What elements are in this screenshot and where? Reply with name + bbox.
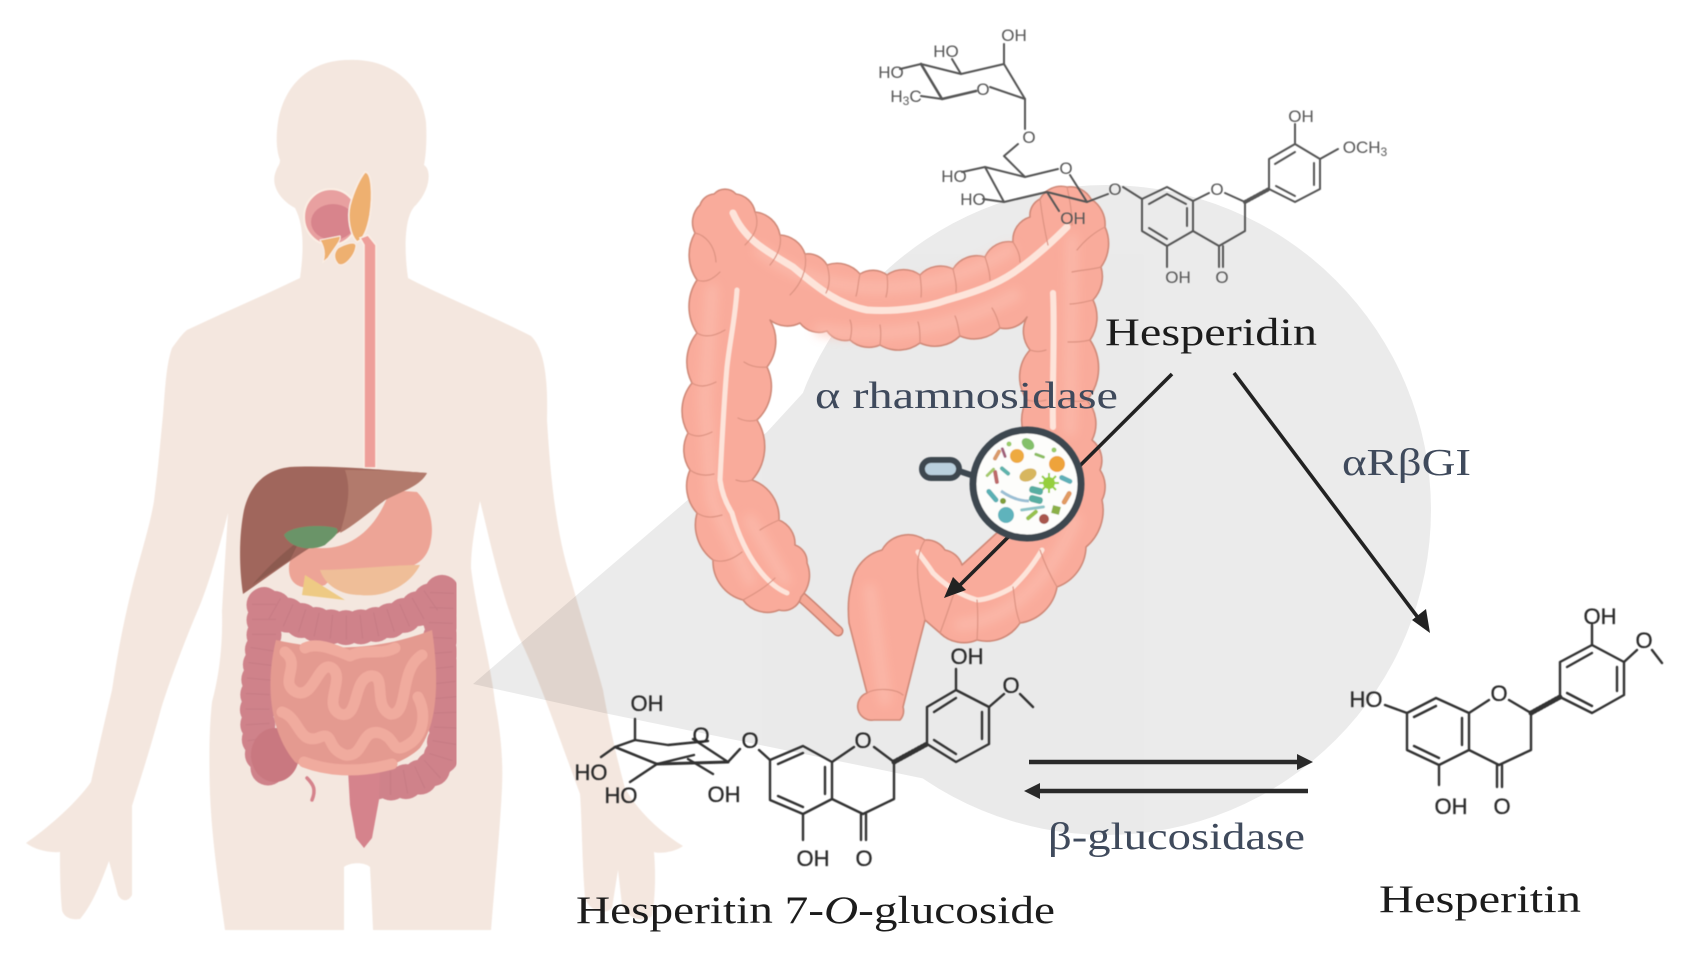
molecule: hesperitin: OH bbox=[1434, 794, 1468, 819]
molecule: hesperidin: HO bbox=[960, 190, 986, 209]
molecule: hesperitin 7-O-glucoside: O bbox=[1002, 673, 1020, 698]
molecule: hesperitin 7-O-glucoside: OH bbox=[950, 644, 984, 669]
molecule: hesperitin 7-O-glucoside: OH bbox=[796, 846, 830, 871]
icon: gallbladder bbox=[284, 526, 338, 548]
molecule: hesperidin: HO bbox=[933, 42, 959, 61]
molecule: hesperidin: O bbox=[1108, 180, 1122, 199]
arrow: reverse equilibrium bbox=[1024, 783, 1308, 799]
icon: appendix bbox=[800, 596, 838, 631]
human body silhouette bbox=[26, 60, 683, 930]
colon haustra folds bbox=[688, 187, 1105, 695]
icon: large intestine in body bbox=[251, 592, 446, 848]
molecule: hesperidin: O bbox=[1059, 159, 1073, 178]
large colon illustration bbox=[682, 186, 1109, 720]
molecule: hesperidin bbox=[878, 26, 1388, 287]
molecule: hesperitin 7-O-glucoside: HO bbox=[574, 760, 608, 785]
molecule: hesperitin 7-O-glucoside: O bbox=[692, 723, 710, 748]
molecule: hesperidin: OH bbox=[1288, 107, 1314, 126]
molecule: hesperidin: HO bbox=[878, 63, 904, 82]
label: beta-glucosidase: β-glucosidase bbox=[1048, 816, 1305, 858]
icon: liver bbox=[240, 467, 427, 594]
icon: stomach bbox=[289, 490, 432, 588]
molecule: hesperidin: OH bbox=[1165, 268, 1191, 287]
icon: magnifying glass with gut microbes bbox=[922, 430, 1081, 538]
molecule: hesperidin: HO bbox=[941, 167, 967, 186]
molecule: hesperitin: O bbox=[1493, 794, 1511, 819]
molecule: hesperidin: O bbox=[1022, 128, 1036, 147]
molecule: hesperidin: OH bbox=[1001, 26, 1027, 45]
icon: pancreas bbox=[320, 565, 420, 595]
colon streaks bbox=[720, 213, 1067, 600]
arrow: hesperidin to hesperitin bbox=[1234, 373, 1430, 633]
icon: esophagus bbox=[360, 235, 376, 468]
label: Hesperitin 7-O-glucoside: Hesperitin 7- O-glucoside bbox=[576, 889, 1055, 932]
arrow: forward equilibrium bbox=[1029, 754, 1313, 770]
label: Hesperidin: Hesperidin bbox=[1105, 311, 1317, 354]
arrow: hesperidin to hesperitin 7-O-glucoside bbox=[944, 374, 1172, 598]
molecule: hesperitin: O bbox=[1635, 628, 1653, 653]
molecule: hesperitin 7-O-glucoside: HO bbox=[604, 783, 638, 808]
grey magnification wedge and circle bbox=[473, 185, 1431, 835]
molecule: hesperidin: OCH bbox=[1343, 138, 1381, 157]
colon shading highlights bbox=[705, 240, 1075, 700]
molecule: hesperidin: C bbox=[909, 87, 922, 106]
molecule: hesperitin 7-O-glucoside: O bbox=[855, 846, 873, 871]
molecule: hesperidin: 3 bbox=[903, 94, 910, 108]
label: Hesperitin: Hesperitin bbox=[1379, 878, 1581, 921]
molecule: hesperitin 7-O-glucoside: OH bbox=[708, 782, 740, 807]
label: alpha rhamnosidase: α rhamnosidase bbox=[815, 375, 1118, 417]
molecule: hesperitin 7-O-glucoside: O bbox=[741, 728, 759, 753]
molecule: hesperitin bbox=[1350, 604, 1662, 819]
molecule: hesperidin: O bbox=[1210, 180, 1224, 199]
molecule: hesperitin 7-O-glucoside bbox=[574, 644, 1033, 871]
digestive organs in body bbox=[240, 172, 446, 848]
molecule: hesperitin 7-O-glucoside: OH bbox=[630, 691, 664, 716]
molecule: hesperitin: O bbox=[1490, 681, 1508, 706]
molecule: hesperidin: OH bbox=[1060, 209, 1086, 228]
label: alphaRbetaGI: αRβGI bbox=[1342, 442, 1471, 484]
molecule: hesperidin: O bbox=[976, 80, 990, 99]
molecule: hesperitin: HO bbox=[1350, 687, 1382, 712]
molecule: hesperitin: OH bbox=[1584, 604, 1616, 629]
colon body bbox=[682, 186, 1109, 720]
molecule: hesperidin: O bbox=[1215, 268, 1229, 287]
icon: small intestine bbox=[270, 630, 436, 774]
molecule: hesperidin: H bbox=[890, 87, 903, 106]
molecule: hesperidin: 3 bbox=[1381, 145, 1388, 159]
molecule: hesperitin 7-O-glucoside: O bbox=[854, 728, 872, 753]
microbes bbox=[985, 436, 1073, 524]
icon: mouth and salivary glands bbox=[304, 172, 372, 265]
